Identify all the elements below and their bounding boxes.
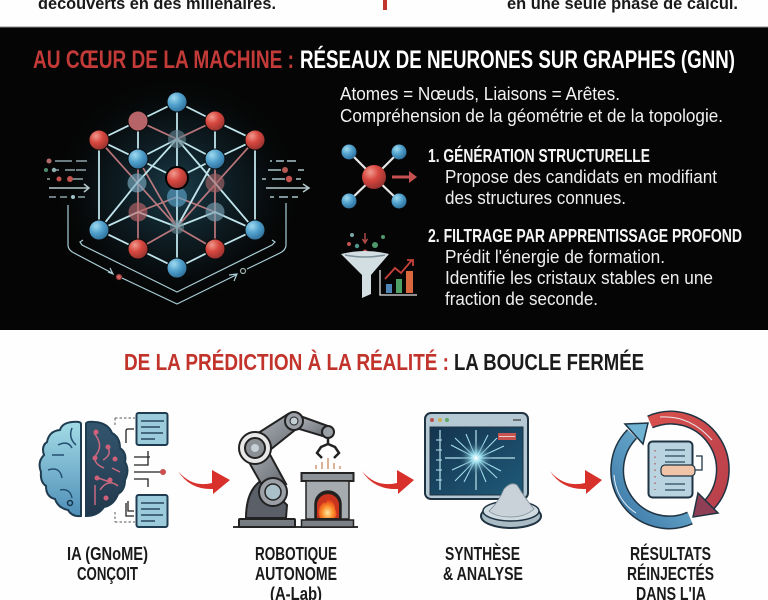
powder dish [481,504,541,528]
step label: results fed back into AI [627,543,714,600]
right data flow [262,161,309,197]
step label: AI designs: CONÇOIT [77,564,138,584]
text block: atoms and bonds: Compréhension de la géométrie et de la topologie. [340,106,723,126]
step label: autonomous robotics [255,544,337,600]
text block: atoms and bonds [340,84,723,126]
step label: autonomous robotics: AUTONOME [255,564,337,584]
icon: analysis screen with powder sample [425,413,541,528]
icon: robot arm and furnace [233,412,358,527]
step label: autonomous robotics: ROBOTIQUE [255,544,337,564]
text block: step 2 deep learning filter: Identifie les cristaux stables en une [445,268,713,288]
step label: synthesis and analysis [443,543,523,584]
arrow: step 2 to step 3 [362,470,414,494]
heading: closed loop section: DE LA PRÉDICTION À LA RÉALITÉ : [124,348,449,375]
arrow: step 3 to step 4 [550,470,602,494]
step label: results fed back into AI: RÉSULTATS [630,543,711,564]
step label: synthesis and analysis: SYNTHÈSE [445,543,520,564]
left data flow [44,158,89,199]
text block: step 1 structural generation: des structures connues. [445,188,626,208]
icon: feedback loop with document [614,417,723,522]
text block: step 1 structural generation: Propose des candidats en modifiant [445,167,717,187]
icon: structure generation molecule [342,144,417,208]
chart: crystal graph network [44,75,309,305]
step label: AI designs: IA (GNoME) [67,544,148,564]
centre red divider [383,0,387,10]
top comparison fragment [38,0,738,13]
data panels [136,413,168,445]
icon: AI brain with data panels [40,413,168,527]
heading: GNN section [33,45,735,74]
step label: synthesis and analysis: & ANALYSE [443,564,523,584]
text block: step 1 structural generation [428,145,717,208]
pink bonds [99,121,255,249]
step label: results fed back into AI: RÉINJECTÉS [627,563,714,584]
arrow: step 1 to step 2 [178,470,230,494]
text block: step 2 deep learning filter [428,226,742,309]
text block: atoms and bonds: Atomes = Nœuds, Liaisons = Arêtes. [340,84,620,104]
panel: inside the machine (GNN) [0,26,768,330]
light bonds [99,102,255,268]
circuit frame and flow arrows [68,203,286,304]
text block: step 2 deep learning filter: Prédit l'énergie de formation. [445,247,665,267]
faded atoms [128,130,224,234]
text block: step 1 structural generation: 1. GÉNÉRATION STRUCTURELLE [428,145,650,166]
bright atoms [89,92,265,278]
icon: deep learning filter funnel [341,233,417,298]
step label: AI designs [67,544,148,584]
heading: GNN section: AU CŒUR DE LA MACHINE : [33,46,294,74]
text block: step 2 deep learning filter: fraction de seconde. [445,289,598,309]
heading: closed loop section: LA BOUCLE FERMÉE [454,348,644,375]
